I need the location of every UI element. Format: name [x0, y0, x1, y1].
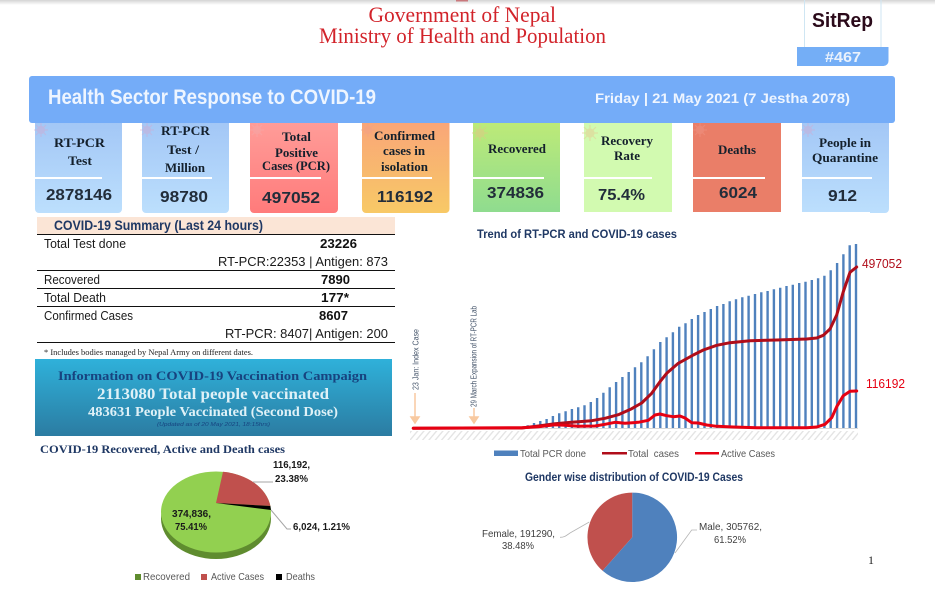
row: confirmed cases: 8607	[319, 308, 348, 323]
card title: isolation	[381, 159, 429, 174]
row: total death: Total Death	[44, 291, 106, 305]
slice: male	[603, 493, 677, 582]
row: recovered	[44, 272, 350, 287]
row: recovered: Recovered	[44, 273, 100, 287]
banner heading: Health Sector Response to COVID-19	[48, 86, 376, 109]
card title: Confirmed	[374, 128, 436, 143]
slice: active cases	[216, 472, 270, 506]
card value: 374836	[487, 185, 544, 202]
heading: recovered, active and death: COVID-19 Recovered, Active and Death cases	[40, 442, 285, 456]
arrow: index case	[411, 393, 419, 423]
label: active: 23.38%	[275, 474, 308, 485]
card value: 912	[828, 188, 857, 205]
row: recovered: 7890	[321, 272, 350, 287]
card title: Rate	[614, 148, 640, 163]
pie chart: recovered, active, deaths	[161, 460, 350, 559]
heading: trend chart: Trend of RT-PCR and COVID-19 cases	[477, 227, 677, 241]
header: government title	[319, 2, 606, 48]
value label: active cases: 116192	[866, 377, 905, 391]
icon: virus	[693, 123, 707, 137]
label: active	[273, 460, 310, 485]
icon: virus	[582, 125, 598, 141]
card: Total Positive Cases	[250, 123, 338, 213]
card value: 75.4%	[598, 187, 645, 204]
heading: gender distribution: Gender wise distribution of COVID-19 Cases	[525, 472, 743, 484]
row: confirmed cases	[44, 308, 388, 341]
card title: People in	[819, 135, 872, 150]
table heading: COVID-19 Summary (Last 24 hours)	[54, 218, 263, 233]
icon: virus	[801, 123, 815, 137]
icon: virus	[250, 123, 264, 137]
pie legend	[135, 571, 315, 583]
label: female: Female, 191290,	[482, 528, 555, 540]
trend chart legend: Active Cases	[721, 448, 775, 460]
page number: 1	[868, 553, 874, 567]
card title: Recovered	[488, 141, 547, 156]
SitRep label: SitRep	[812, 10, 873, 32]
card title: Million	[165, 160, 206, 175]
label: female	[482, 528, 555, 552]
panel: COVID-19 summary table	[37, 217, 395, 342]
SitRep badge	[797, 0, 888, 66]
trend chart legend: Total PCR done	[520, 448, 586, 460]
panel: vaccination campaign	[35, 359, 392, 436]
card title: cases in	[383, 143, 426, 158]
card title	[54, 135, 106, 168]
label: female: 38.48%	[502, 540, 534, 552]
row: total death: 177*	[321, 290, 350, 305]
vaccination heading: Information on COVID-19 Vaccination Campaign	[58, 368, 368, 383]
card title	[812, 135, 878, 165]
card value: 6024	[719, 185, 757, 202]
footnote: * Includes bodies managed by Nepal Army on different dates.	[44, 348, 253, 357]
label: active: 116,192,	[273, 460, 310, 471]
card title: Deaths	[718, 142, 756, 157]
card title: Test /	[167, 142, 199, 157]
pie legend: Active Cases	[211, 571, 264, 583]
label: male: Male, 305762,	[699, 521, 762, 533]
row: total test done: 23226	[320, 236, 357, 251]
header: government title: Government of Nepal	[368, 2, 556, 27]
total vaccinated: 2113080 Total people vaccinated	[97, 386, 329, 403]
label: male	[699, 521, 762, 546]
label: recovered: 374,836,	[172, 509, 211, 520]
icon: virus	[140, 123, 154, 137]
annotation: index case: 23 Jan: Index Case	[412, 329, 420, 390]
card: RT-PCR Test per Million	[140, 123, 229, 213]
card title: Quarantine	[812, 150, 878, 165]
pie chart: gender distribution	[482, 493, 762, 582]
card title: Cases (PCR)	[262, 158, 330, 173]
card title: RT-PCR	[161, 123, 211, 138]
card title: Total	[282, 129, 311, 144]
card title: Test	[68, 153, 93, 168]
label: recovered	[172, 509, 211, 533]
slice: female	[587, 493, 632, 571]
row: confirmed cases: RT-PCR: 8407| Antigen: 200	[225, 327, 388, 341]
arrow: lab expansion	[470, 408, 478, 423]
trend chart legend	[494, 448, 775, 460]
line: total cases	[413, 267, 857, 428]
pie legend: Recovered	[143, 571, 190, 583]
card value: 116192	[377, 189, 433, 206]
card title	[262, 129, 330, 173]
issue number tab	[797, 47, 888, 66]
row: total test done	[44, 236, 388, 269]
title banner	[29, 76, 895, 123]
second dose: 483631 People Vaccinated (Second Dose)	[88, 404, 338, 419]
card value: 2878146	[46, 187, 112, 204]
update note: (Updated as of 20 May 2021, 18:15hrs)	[157, 422, 270, 428]
icon: virus	[361, 123, 375, 137]
card title	[374, 128, 436, 174]
row: confirmed cases: Confirmed Cases	[44, 309, 133, 323]
label: male: 61.52%	[714, 534, 746, 546]
card title: RT-PCR	[54, 135, 106, 150]
card: Deaths	[693, 123, 781, 212]
card: RT-PCR Test	[34, 123, 122, 213]
pie legend: Deaths	[286, 571, 315, 583]
emblem fragment	[456, 0, 468, 2]
card: Recovery Rate	[582, 123, 672, 212]
icon: virus	[34, 123, 48, 137]
issue number: #467	[825, 49, 861, 66]
chart: trend of RT-PCR and cases	[410, 244, 905, 440]
card: Confirmed cases in isolation	[361, 123, 450, 213]
icon: virus	[472, 125, 488, 141]
card: People in Quarantine	[801, 123, 889, 213]
trend chart legend: Total cases	[628, 448, 679, 460]
row: total test done: RT-PCR:22353 | Antigen: 873	[218, 255, 388, 269]
card value: 98780	[160, 189, 208, 206]
row: total death	[44, 290, 350, 305]
card value: 497052	[262, 190, 320, 207]
card: Recovered	[472, 123, 560, 212]
value label: total cases: 497052	[862, 257, 902, 271]
card title: Recovery	[601, 133, 653, 148]
card title	[161, 123, 211, 175]
header: government title: Ministry of Health and Population	[319, 23, 606, 48]
slice: deaths	[216, 503, 271, 510]
card title: Positive	[275, 145, 318, 160]
card title	[601, 133, 653, 163]
banner date: Friday | 21 May 2021 (7 Jestha 2078)	[595, 91, 850, 106]
row: total test done: Total Test done	[44, 237, 126, 251]
label: deaths: 6,024, 1.21%	[293, 522, 350, 533]
line: active cases	[413, 391, 857, 428]
bars: total PCR done	[528, 244, 856, 428]
annotation: lab expansion: 29 March Expansion of RT-PCR Lab	[470, 306, 478, 407]
label: recovered: 75.41%	[175, 522, 207, 533]
